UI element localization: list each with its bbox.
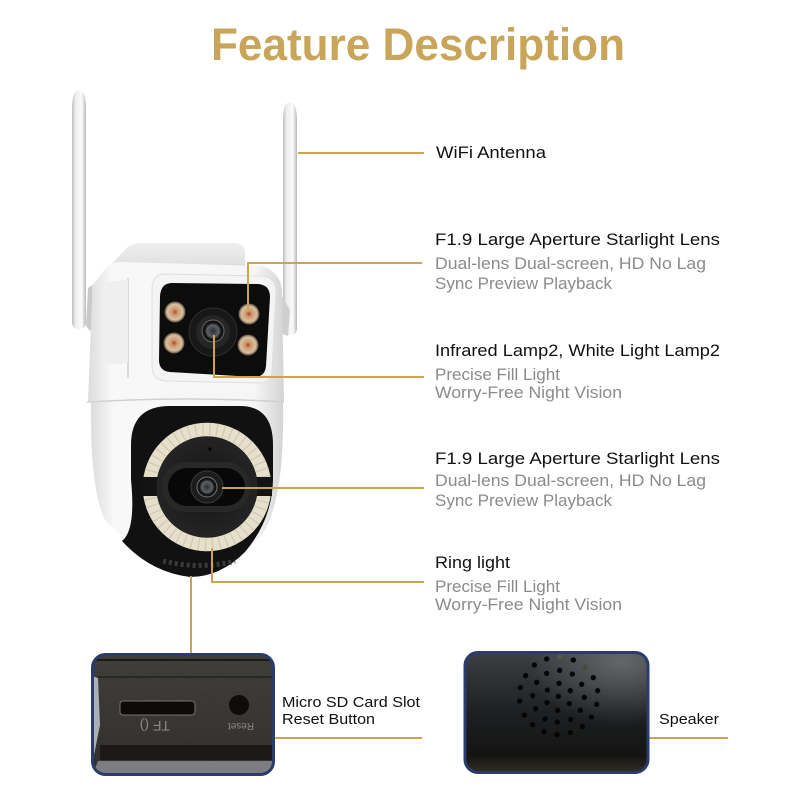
label line: Reset Button (282, 712, 375, 728)
leader line: speaker (649, 737, 728, 739)
heading: Ring light (435, 553, 510, 572)
panel: SD card slot photo (91, 653, 275, 776)
leader line: antenna (298, 152, 424, 154)
lower camera body (91, 402, 283, 560)
description: Dual-lens Dual-screen, HD No Lag (435, 471, 706, 490)
upper body seam (87, 278, 284, 402)
lower camera module (162, 462, 250, 512)
leader line: lower lens (222, 487, 424, 489)
panel: speaker photo (463, 651, 649, 774)
speaker vent (163, 561, 235, 566)
description: Sync Preview Playback (435, 274, 612, 293)
speaker holes (517, 654, 600, 737)
description: Precise Fill Light (435, 365, 560, 384)
icon: right antenna bracket (282, 296, 290, 336)
label: Micro SD and reset (282, 695, 420, 728)
leader line: SD card (275, 737, 422, 739)
description: Worry-Free Night Vision (435, 383, 622, 402)
leader line: bottom port (190, 576, 192, 653)
description: Dual-lens Dual-screen, HD No Lag (435, 254, 706, 273)
lower black shell (122, 406, 273, 577)
upper lens frame (152, 274, 276, 383)
text block: ring light (435, 553, 622, 614)
label: speaker: Speaker (659, 712, 719, 728)
icon: LED lamps (164, 302, 260, 356)
title: Feature Description (211, 19, 625, 70)
leader line: ring light (212, 548, 424, 582)
camera top cap (104, 243, 245, 272)
heading: Infrared Lamp2, White Light Lamp2 (435, 341, 720, 360)
text block: upper lens (435, 230, 720, 293)
label line: Micro SD Card Slot (282, 695, 420, 711)
leader line: upper lens lamp (248, 263, 422, 310)
lower camera pill (168, 468, 245, 506)
text block: lamps (435, 341, 720, 402)
icon: SD slot (120, 701, 195, 715)
icon: lower lens (191, 471, 223, 503)
upper side recess (106, 280, 128, 365)
heading: F1.9 Large Aperture Starlight Lens (435, 449, 720, 468)
icon: reset hole (229, 695, 249, 715)
icon: left antenna (72, 90, 86, 329)
ring light (142, 430, 272, 544)
heading: F1.9 Large Aperture Starlight Lens (435, 230, 720, 249)
icon: left antenna bracket (86, 282, 97, 331)
leader line: infrared lamp (214, 335, 424, 377)
upper camera body (88, 262, 284, 402)
description: Worry-Free Night Vision (435, 595, 622, 614)
icon: right antenna (283, 102, 297, 335)
description: Sync Preview Playback (435, 491, 612, 510)
text block: lower lens (435, 449, 720, 510)
engraved text: TF () (140, 718, 170, 734)
icon: upper lens (189, 308, 237, 356)
description: Precise Fill Light (435, 577, 560, 596)
engraved text: Reset (228, 720, 254, 731)
label: WiFi antenna: WiFi Antenna (436, 143, 547, 162)
camera illustration (72, 90, 297, 577)
upper lens black panel (159, 283, 270, 377)
